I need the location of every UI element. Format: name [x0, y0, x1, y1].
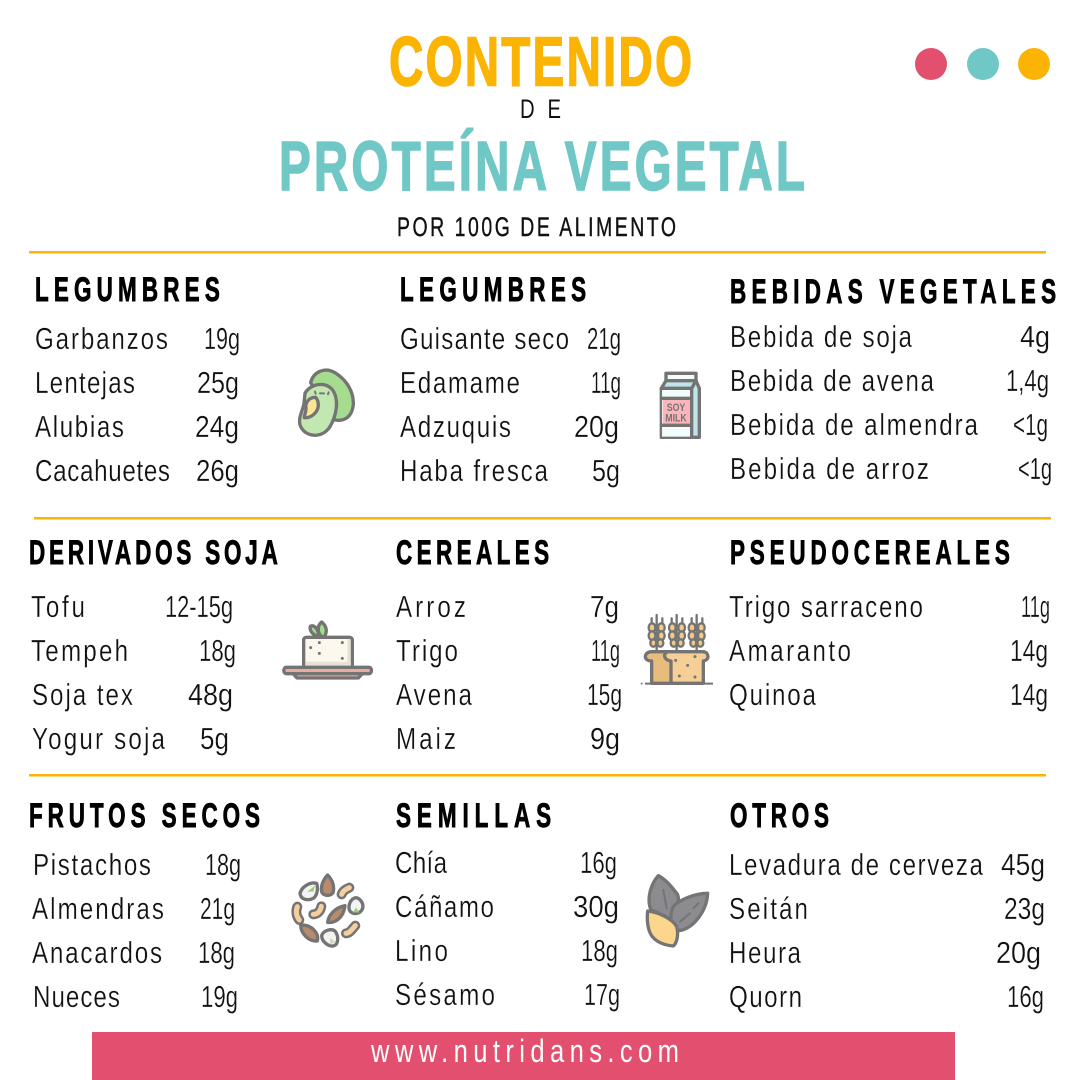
title: proteína vegetal: PROTEÍNA VEGETAL [279, 127, 805, 205]
icon: beans [300, 370, 353, 435]
heading: DERIVADOS SOJA [29, 534, 278, 572]
heading: BEBIDAS VEGETALES [730, 273, 1056, 311]
list: 17g [584, 977, 620, 1012]
list: 18g [581, 933, 618, 968]
list [729, 847, 1045, 1014]
list: Cáñamo [395, 889, 494, 924]
list: Arroz [396, 589, 466, 624]
list: Edamame [400, 365, 520, 400]
list: Bebida de arroz [730, 451, 929, 486]
list: Nueces [33, 979, 120, 1014]
panel: bebidas vegetales [730, 273, 1056, 486]
list: Alubias [35, 409, 124, 444]
heading: OTROS [730, 797, 829, 835]
icon: soy milk carton [661, 373, 699, 437]
list: 48g [188, 677, 233, 712]
footer url: www.nutridans.com [370, 1034, 679, 1070]
list: Quinoa [729, 677, 816, 712]
panel: pseudocereales [729, 534, 1050, 712]
panel: legumbres 2 [400, 271, 621, 488]
panel: derivados soja [29, 534, 278, 756]
list: 19g [204, 321, 240, 356]
list: Cacahuetes [35, 453, 170, 488]
list: Haba fresca [400, 453, 548, 488]
list: <1g [1013, 407, 1048, 442]
list: Lentejas [35, 365, 135, 400]
list: Avena [396, 677, 472, 712]
heading: CEREALES [396, 534, 549, 572]
list: Bebida de avena [730, 363, 934, 398]
list: 4g [1020, 319, 1050, 354]
list: 18g [198, 935, 235, 970]
list: Chía [395, 845, 448, 880]
list: Bebida de soja [730, 319, 912, 354]
list: 24g [195, 409, 239, 444]
list: 30g [573, 889, 619, 924]
icon: wheat and bread [641, 615, 713, 685]
list: Anacardos [32, 935, 162, 970]
heading: PSEUDOCEREALES [730, 534, 1010, 572]
title: de: DE [520, 94, 561, 125]
list: Bebida de almendra [730, 407, 978, 442]
list: 5g [200, 721, 229, 756]
list: Heura [729, 935, 801, 970]
list: <1g [1018, 451, 1052, 486]
list: Tofu [31, 589, 85, 624]
list: 16g [1007, 979, 1044, 1014]
list: 11g [1021, 589, 1050, 624]
list: 11g [591, 633, 620, 668]
panel: cereales [396, 534, 622, 756]
list [32, 847, 241, 1014]
list: 11g [591, 365, 621, 400]
list: Seitán [729, 891, 808, 926]
carton label [665, 402, 687, 425]
list: Sésamo [395, 977, 495, 1012]
carton label: MILK [665, 412, 687, 425]
list: Pistachos [33, 847, 151, 882]
list: 9g [590, 721, 620, 756]
panel: otros [729, 797, 1045, 1014]
icon: mixed nuts [296, 875, 363, 946]
list: Soja tex [32, 677, 133, 712]
list: 15g [587, 677, 622, 712]
list [730, 319, 1052, 486]
list: 25g [197, 365, 239, 400]
list [396, 589, 622, 756]
list [31, 589, 236, 756]
list: 20g [574, 409, 619, 444]
list: Tempeh [31, 633, 128, 668]
list: 1,4g [1006, 363, 1049, 398]
list: 45g [1001, 847, 1045, 882]
list: Almendras [32, 891, 164, 926]
panel: frutos secos [29, 797, 260, 1014]
list: 21g [200, 891, 235, 926]
list: Lino [395, 933, 448, 968]
heading: LEGUMBRES [35, 271, 220, 309]
list: 14g [1010, 633, 1048, 668]
list: 18g [199, 633, 236, 668]
icon: tofu [284, 622, 371, 678]
list: 12-15g [165, 589, 233, 624]
list: Amaranto [729, 633, 851, 668]
title: contenido: CONTENIDO [389, 22, 692, 101]
footer banner [92, 1032, 955, 1080]
heading: LEGUMBRES [400, 271, 586, 309]
list: Garbanzos [35, 321, 168, 356]
list: 14g [1010, 677, 1048, 712]
list: 18g [205, 847, 241, 882]
heading: FRUTOS SECOS [29, 797, 260, 835]
list: Levadura de cerveza [729, 847, 983, 882]
list: Quorn [729, 979, 802, 1014]
list: Adzuquis [400, 409, 511, 444]
list: 19g [201, 979, 238, 1014]
list: 26g [196, 453, 239, 488]
list: 5g [592, 453, 620, 488]
title block [279, 22, 805, 242]
list: Trigo [396, 633, 458, 668]
list: Guisante seco [400, 321, 569, 356]
list [35, 321, 240, 488]
panel: legumbres 1 [35, 271, 240, 488]
list [729, 589, 1050, 712]
list [395, 845, 620, 1012]
list: Trigo sarraceno [729, 589, 923, 624]
panel: semillas [395, 797, 620, 1012]
list: 21g [587, 321, 621, 356]
list: 16g [580, 845, 617, 880]
carton label: SOY [667, 402, 686, 414]
subtitle: POR 100G DE ALIMENTO [397, 212, 676, 242]
decorative dots [915, 48, 1050, 80]
list: 7g [590, 589, 619, 624]
list: Maiz [396, 721, 456, 756]
list [400, 321, 621, 488]
list: 23g [1004, 891, 1045, 926]
list: Yogur soja [32, 721, 165, 756]
icon: seeds [647, 876, 708, 946]
heading: SEMILLAS [396, 797, 551, 835]
list: 20g [996, 935, 1041, 970]
